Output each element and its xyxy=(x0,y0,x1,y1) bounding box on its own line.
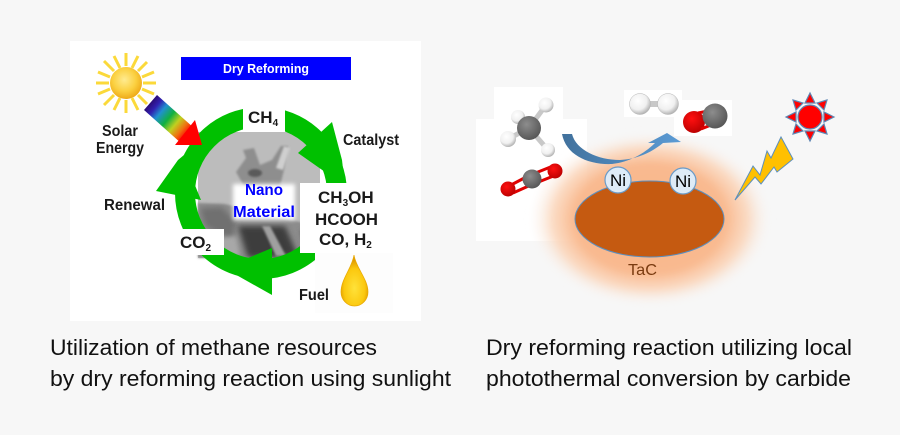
molecule: CO2 xyxy=(500,164,562,196)
TaC particle xyxy=(575,181,724,257)
panel: white backing of reactant molecules xyxy=(476,87,587,241)
label boxes masking ring xyxy=(177,103,393,313)
icon: sun xyxy=(96,53,156,113)
Ni atom right xyxy=(670,168,696,194)
label: CO2: 2 xyxy=(206,243,212,254)
Ni atom right: Ni xyxy=(675,172,691,191)
label: products: CO, H xyxy=(319,230,366,249)
label: Nano Material: Nano xyxy=(245,182,283,199)
label: Solar Energy: Solar xyxy=(102,123,138,140)
label: products: 2 xyxy=(366,240,372,251)
panel: solar dry reforming cycle xyxy=(70,41,421,321)
label: Nano Material: Material xyxy=(233,204,295,221)
molecule: CH4 xyxy=(500,98,555,157)
title banner: Dry Reforming: Dry Reforming xyxy=(223,61,309,76)
molecule: CO xyxy=(683,104,728,133)
caption: left: Utilization of methane resources xyxy=(50,335,377,360)
Ni atom left xyxy=(605,167,631,193)
label: CH4: CH xyxy=(248,108,273,127)
label: products: OH xyxy=(348,188,374,207)
green cycle ring with arrows xyxy=(156,117,345,295)
label: Fuel: Fuel xyxy=(299,287,329,304)
Ni atom left: Ni xyxy=(610,171,626,190)
arrow: rainbow sunlight xyxy=(144,95,202,145)
icon: lightning xyxy=(735,137,793,200)
label: CO2: CO xyxy=(180,233,206,252)
label: TaC: TaC xyxy=(628,262,657,279)
panel: white backing of product molecules xyxy=(624,90,732,136)
label: products: HCOOH xyxy=(315,210,378,229)
orange photothermal glow xyxy=(528,131,772,307)
label: products: 3 xyxy=(343,198,349,209)
caption: left xyxy=(50,335,451,391)
label: Renewal: Renewal xyxy=(104,197,165,214)
caption: right xyxy=(486,335,852,391)
microscope photo of nano material xyxy=(198,132,320,258)
caption: right: photothermal conversion by carbide xyxy=(486,366,851,391)
arrow: reaction swoosh xyxy=(562,133,681,164)
caption: right: Dry reforming reaction utilizing local xyxy=(486,335,852,360)
caption: left: by dry reforming reaction using sunlight xyxy=(50,366,451,391)
title banner: Dry Reforming xyxy=(181,57,351,80)
label: Nano Material xyxy=(233,182,295,221)
label: products: CH xyxy=(318,188,343,207)
label: CH4: 4 xyxy=(273,118,279,129)
molecule: H2 xyxy=(630,94,678,114)
label: Catalyst: Catalyst xyxy=(343,132,399,149)
label: Solar Energy: Energy xyxy=(96,140,144,157)
icon: fuel drop xyxy=(341,255,368,306)
label: products xyxy=(315,188,378,251)
label: Solar Energy xyxy=(96,123,144,157)
icon: red star sun xyxy=(786,93,834,141)
